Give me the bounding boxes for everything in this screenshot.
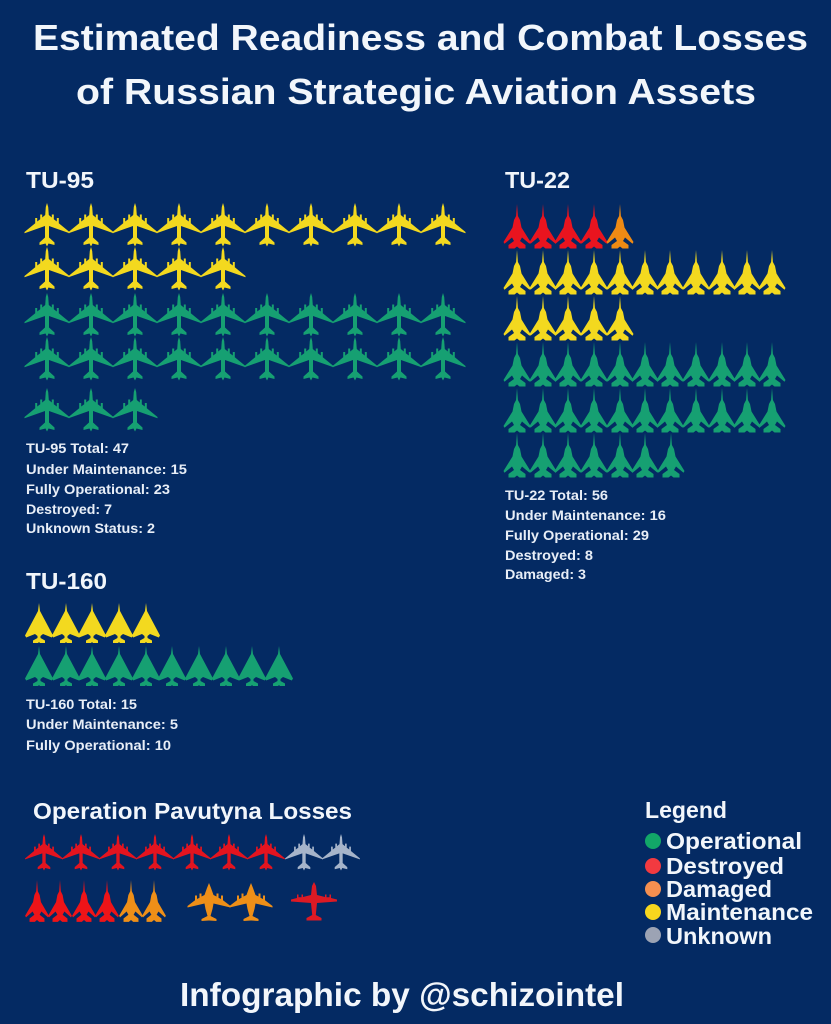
icons: TU-95 unknown [285, 834, 360, 871]
icons: TU-95 under maintenance [24, 203, 466, 290]
legend [645, 797, 813, 949]
icons: TU-95 destroyed [25, 834, 285, 871]
icons: TU-22 destroyed [504, 204, 608, 248]
stats: TU-160 [26, 697, 179, 753]
icon: aircraft destroyed [291, 882, 337, 920]
stats: TU-95 [26, 441, 188, 536]
icon: TU-22 damaged [606, 204, 634, 248]
heading: Operation Pavutyna Losses: Operation Pavutyna Losses [33, 798, 352, 824]
legend item: destroyed: Destroyed [666, 853, 784, 879]
stats: TU-22: Destroyed: 8 [505, 548, 594, 563]
icons: TU-22 under maintenance [504, 250, 786, 340]
legend item: maintenance: Maintenance [666, 899, 813, 925]
stats: TU-95: TU-95 Total: 47 [26, 441, 129, 456]
title: Estimated Readiness and Combat Losses [33, 17, 808, 58]
panel: TU-22 [504, 167, 786, 582]
legend item: unknown: Unknown [666, 923, 772, 949]
icons: TU-22 damaged [119, 880, 166, 922]
heading: TU-22: TU-22 [505, 167, 570, 193]
stats: TU-22: Fully Operational: 29 [505, 528, 649, 543]
stats: TU-22: Under Maintenance: 16 [505, 508, 667, 523]
legend item: operational: Operational [666, 828, 802, 854]
heading: TU-160: TU-160 [26, 568, 107, 594]
icons: TU-95 operational [24, 293, 466, 432]
title [33, 17, 808, 112]
stats: TU-95: Under Maintenance: 15 [26, 462, 188, 477]
icons: TU-160 under maintenance [25, 603, 160, 643]
panel: TU-95 [24, 167, 466, 536]
panel: Operation Pavutyna losses [25, 798, 360, 922]
stats: TU-95: Destroyed: 7 [26, 502, 112, 517]
stats: TU-22: Damaged: 3 [505, 567, 587, 582]
panel: TU-160 [25, 568, 293, 753]
stats: TU-95: Unknown Status: 2 [26, 521, 155, 536]
icons: TU-22 destroyed [25, 880, 119, 922]
icons: TU-22 operational [504, 342, 786, 478]
legend title: Legend [645, 797, 727, 823]
footer credit: Infographic by @schizointel [180, 976, 624, 1013]
stats: TU-160: Under Maintenance: 5 [26, 717, 179, 732]
stats: TU-22: TU-22 Total: 56 [505, 488, 609, 503]
legend item: damaged: Damaged [666, 876, 772, 902]
stats: TU-160: Fully Operational: 10 [26, 738, 171, 753]
heading: TU-95: TU-95 [26, 167, 94, 193]
stats: TU-22 [505, 488, 667, 582]
icons: transport aircraft damaged [188, 883, 272, 921]
stats: TU-95: Fully Operational: 23 [26, 482, 171, 497]
title: of Russian Strategic Aviation Assets [76, 71, 756, 112]
icons: TU-160 operational [25, 646, 293, 686]
stats: TU-160: TU-160 Total: 15 [26, 697, 138, 712]
